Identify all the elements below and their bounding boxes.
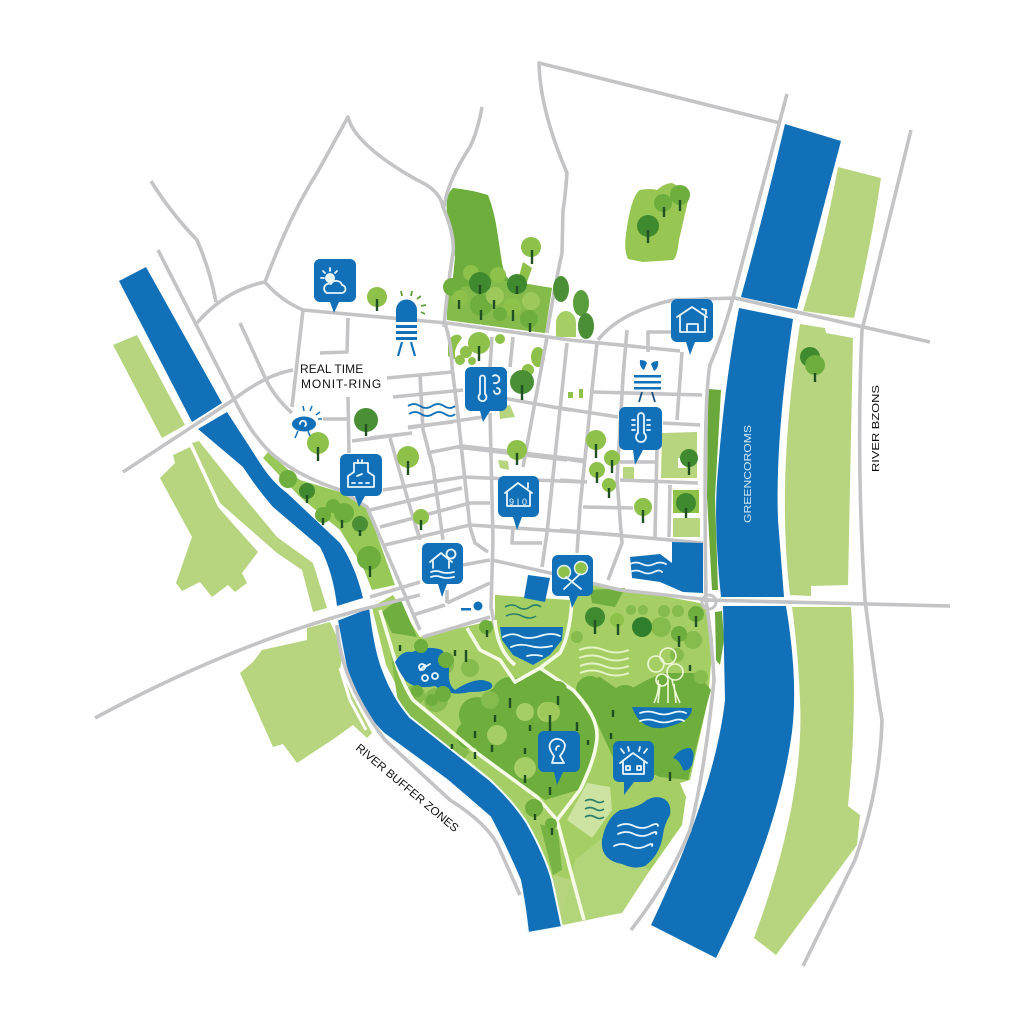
icon pin: house centre: 9I0 bbox=[509, 497, 527, 507]
river: right upper segment bbox=[741, 124, 841, 309]
park forest, central bbox=[405, 656, 597, 800]
icon: sensor tower west bbox=[396, 291, 426, 356]
shield pond bbox=[495, 595, 567, 665]
icon pin: weather bbox=[314, 259, 356, 313]
green corridor strip along the right river bbox=[707, 389, 724, 665]
city street grid bbox=[265, 282, 710, 637]
icon: outlined trees bbox=[648, 648, 683, 703]
outer ring roads bbox=[95, 63, 950, 966]
west park lake bbox=[395, 648, 492, 694]
river: right middle segment bbox=[716, 308, 793, 597]
central north park bbox=[447, 188, 576, 376]
river: left middle segment bbox=[198, 412, 363, 606]
southeast lake bbox=[602, 797, 670, 868]
small east pond bbox=[673, 748, 694, 770]
label: river buffer zones left: RIVER BUFFER ZONES bbox=[353, 742, 461, 835]
icon pin: key bbox=[538, 731, 580, 785]
pale dark waves on meadow bbox=[585, 800, 604, 818]
tree group: north park bbox=[443, 237, 594, 339]
river: left lower segment bbox=[337, 607, 562, 933]
left river buffer green zones bbox=[113, 335, 372, 763]
river: left upper segment bbox=[119, 267, 222, 422]
icon pin: thermometer centre bbox=[465, 367, 507, 422]
label: green corridors: GREENCOROMS bbox=[743, 425, 754, 523]
city green patches bbox=[498, 389, 700, 537]
icon pin: thermometer east bbox=[619, 407, 662, 465]
rivers bbox=[119, 124, 841, 958]
icon pin: trees and tools bbox=[552, 555, 593, 608]
park forest, east bbox=[571, 605, 711, 780]
small pond marker bbox=[461, 602, 482, 610]
city water block bbox=[630, 542, 703, 593]
trees bbox=[279, 185, 825, 835]
blue square pond bbox=[524, 575, 550, 602]
icon pin: factory bbox=[340, 454, 382, 507]
river: right lower segment bbox=[651, 606, 794, 958]
right river buffer green zones bbox=[754, 167, 881, 955]
icon: sensor cloud bbox=[292, 406, 322, 438]
tree pond bbox=[632, 707, 692, 728]
label: real time monitoring: REAL TIME bbox=[300, 362, 363, 376]
tree group: northeast park bbox=[637, 185, 690, 243]
icon pin: house northeast bbox=[671, 299, 713, 355]
label: real time monitoring: MONIT-RING bbox=[301, 377, 381, 391]
green bank between left river and city bbox=[263, 452, 395, 590]
northeast park bbox=[625, 183, 690, 262]
label: river buffer zones right: RIVER BZONS bbox=[870, 385, 882, 472]
pale waves bbox=[579, 648, 629, 676]
icon pin: house with rays bbox=[613, 741, 654, 795]
tree group: city bbox=[307, 287, 698, 530]
tree group: right bank bbox=[279, 347, 825, 577]
tree group: south park bbox=[400, 606, 704, 835]
icon pin: house centre bbox=[498, 476, 539, 530]
park footpaths bbox=[380, 600, 597, 920]
city river waves icon bbox=[408, 404, 455, 416]
icon: sensor tower east bbox=[634, 360, 661, 402]
icon pin: flood house bbox=[422, 543, 463, 597]
south park base bbox=[372, 583, 713, 925]
